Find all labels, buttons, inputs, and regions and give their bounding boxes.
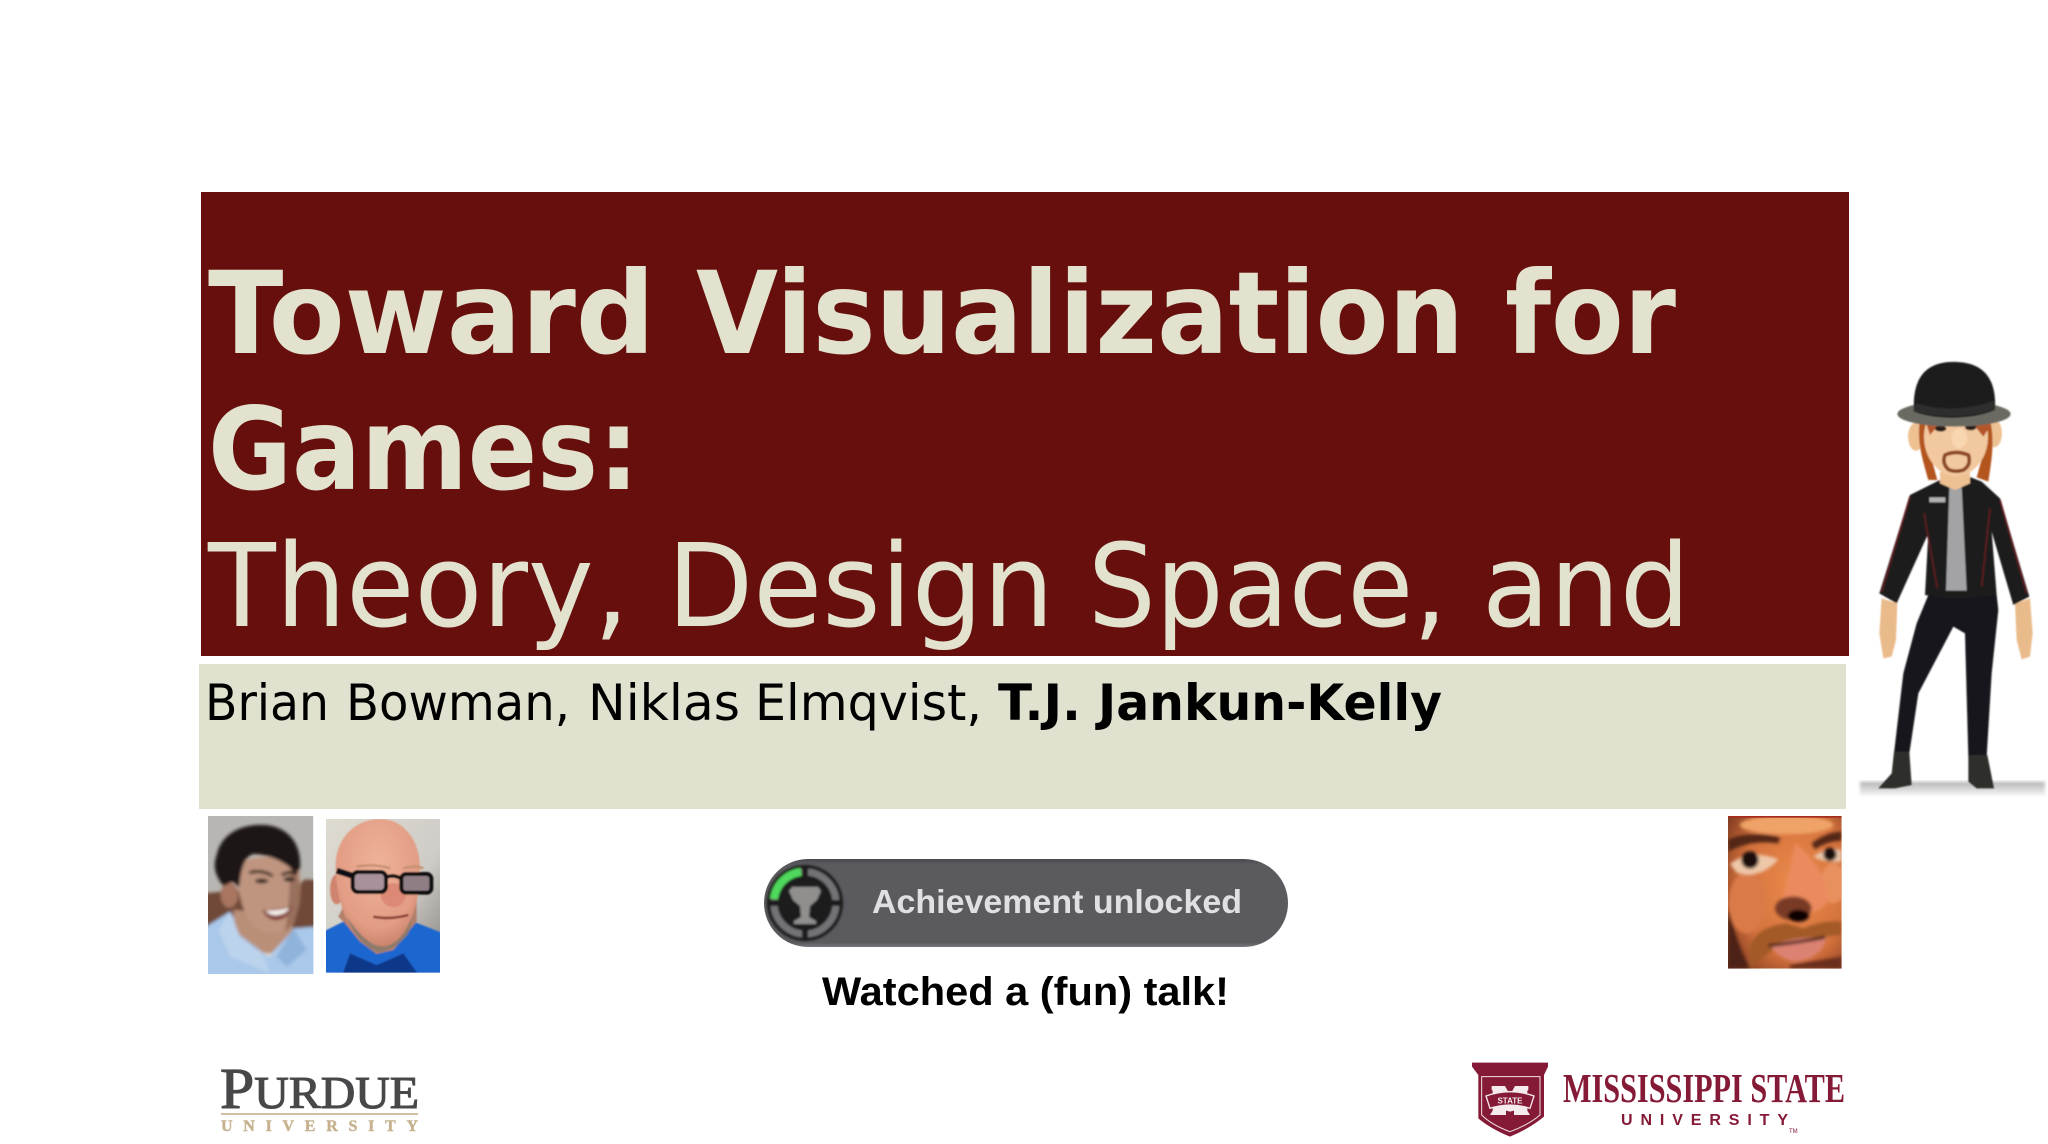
wordmark: MISSISSIPPI STATE [1563,1065,1845,1111]
avatar jacket [1879,475,2029,605]
title line 3: Design [667,520,1054,654]
photo: Brian Bowman [208,816,314,974]
avatar bowler hat [1897,401,2011,427]
icon: MSU shield [1472,1063,1548,1137]
title line 3: Theory, [207,520,629,654]
icon: achievement ring [767,865,843,941]
icon: MSU shield: STATE [1497,1097,1523,1106]
logo: Purdue University: UNIVERSITY [221,1118,418,1135]
author bold: T.J. [998,674,1081,732]
avatar [1860,362,2045,796]
authors regular: Elmqvist, [755,674,982,732]
achievement badge [764,859,1288,947]
title line 1: Visualization [696,247,1464,380]
title line 1 [208,247,1676,380]
photo: T.J. Jankun-Kelly [1728,816,1847,969]
avatar floor shadow [1860,782,2045,796]
photo: Niklas Elmqvist [323,819,443,977]
avatar head [1908,423,1924,451]
authors regular: Bowman, [346,674,570,732]
title line 1: for [1505,247,1676,380]
avatar hands [1879,598,1897,658]
logo: Purdue University: PURDUE [220,1056,419,1121]
logo: Mississippi State University: TM [1789,1129,1798,1135]
title line 2: Games: [208,383,639,516]
logo: Mississippi State University: UNIVERSITY [1621,1112,1788,1129]
badge label: Achievement unlocked [872,883,1242,920]
title line 1: Toward [208,247,655,380]
panel: title banner [201,192,1849,656]
icon: trophy [789,887,821,924]
logo: Mississippi State University [1472,1063,1845,1137]
authors regular [205,674,982,732]
title line 3: Space, [1088,520,1447,654]
author bold: Jankun-Kelly [1095,674,1442,732]
caption: Watched a (fun) talk! [822,970,1229,1014]
avatar legs [1894,595,1998,757]
authors regular: Niklas [588,674,740,732]
title line 3: and [1482,520,1690,654]
panel: authors [199,664,1846,809]
authors regular: Brian [205,674,329,732]
title line 3 [207,520,1690,654]
